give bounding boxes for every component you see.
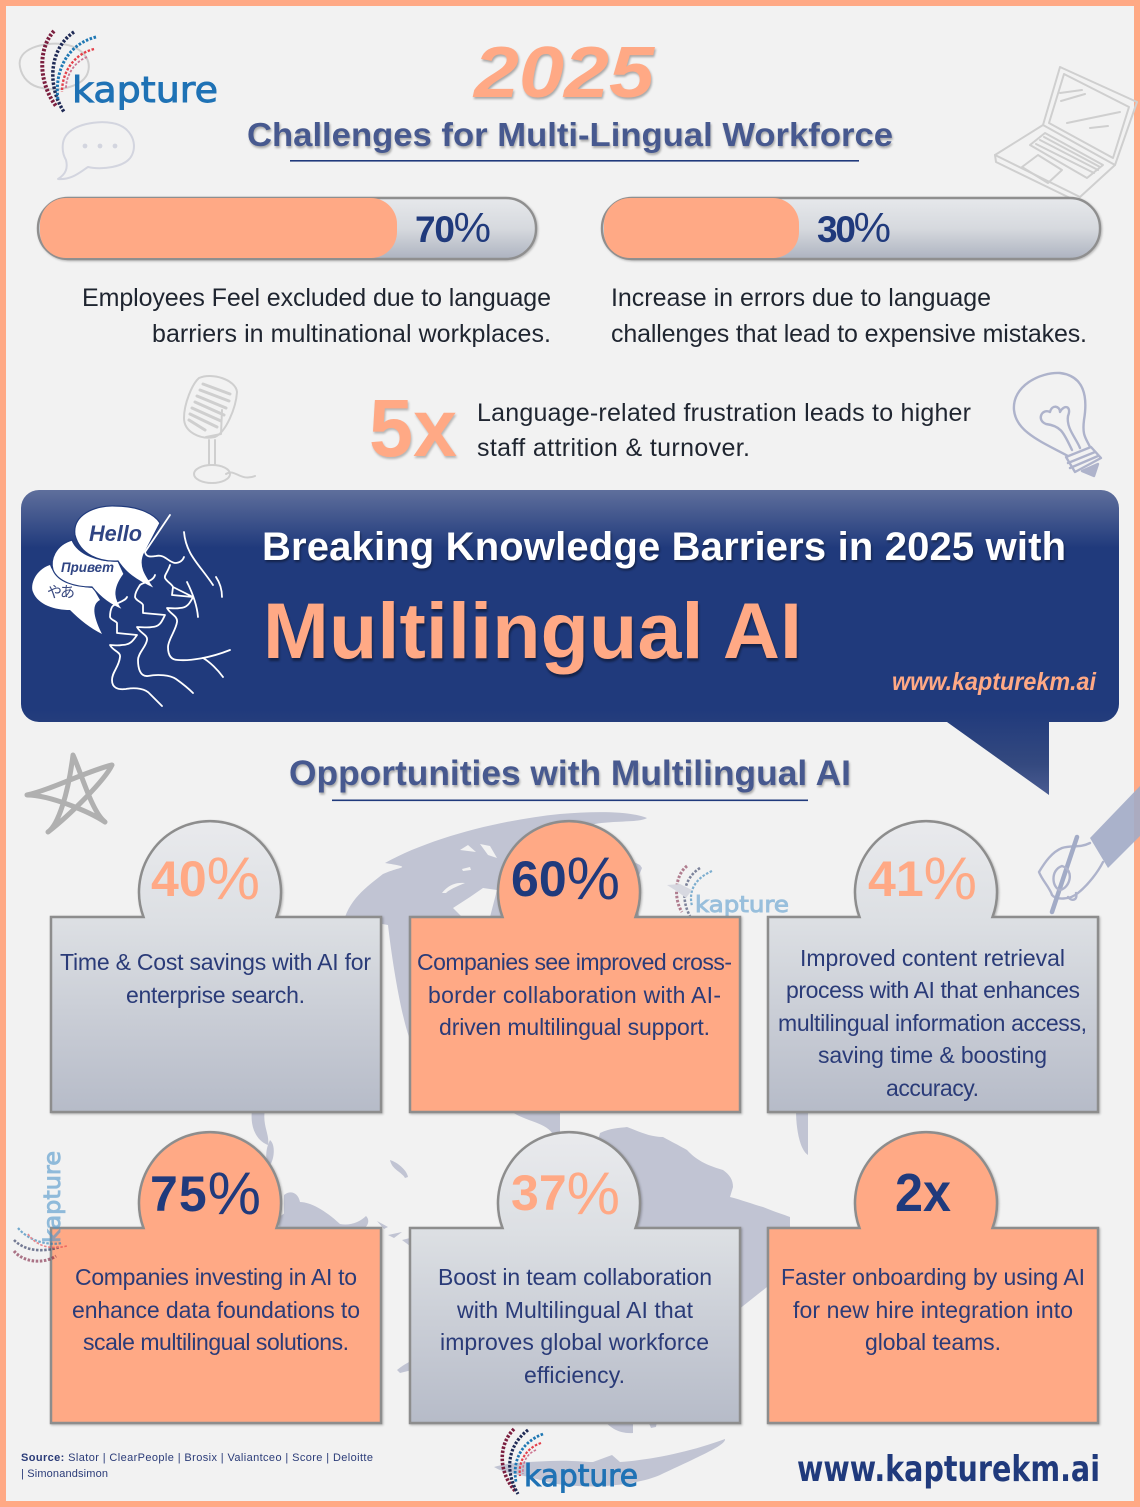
stat: 5x: 5x [369, 383, 457, 474]
source list: | Simonandsimon [21, 1468, 108, 1480]
icon: laptop sketch [995, 67, 1137, 198]
card: 37 percent team collaboration: % [567, 1160, 620, 1227]
card: 41 percent retrieval: accuracy. [886, 1075, 979, 1101]
text: frustration and attrition: Language-related frustration leads to higher [477, 399, 971, 427]
card: 40 percent time and cost: 40 [151, 851, 207, 907]
card: 40 percent time and cost: enterprise search. [126, 982, 305, 1008]
card: 41 percent retrieval [768, 821, 1098, 1112]
icon: microphone sketch [184, 376, 255, 483]
card: 60 percent collaboration: border collaboration with AI- [428, 982, 721, 1008]
watermark logo: kapture mid: kapture [695, 893, 789, 918]
card: 75 percent data foundations: enhance data foundations to [72, 1297, 360, 1323]
watermark logo: vertical kapture: kapture [40, 1151, 66, 1243]
banner title: Multilingual AI [263, 586, 802, 675]
card: 41 percent retrieval: 41 [868, 851, 924, 907]
card: 60 percent collaboration: % [567, 845, 620, 912]
progress bar: 30 percent: 30% [817, 204, 891, 251]
watermark logo: kapture mid [667, 866, 789, 918]
banner heading: Breaking Knowledge Barriers in 2025 with [262, 525, 1066, 569]
progress bar: 30 percent [602, 198, 1100, 259]
logo: kapture top [42, 31, 218, 112]
opportunities underline [332, 800, 808, 801]
heading underline [290, 160, 859, 162]
illustration: speaking faces and bubbles: Привет [61, 559, 114, 575]
heading: opportunities: Opportunities with Multilingual AI [289, 754, 851, 793]
progress bar: 70 percent [38, 198, 536, 259]
text: employees excluded: barriers in multinational workplaces. [152, 320, 551, 348]
card: 41 percent retrieval: saving time & boosting [818, 1042, 1047, 1068]
icon: logo arcs [42, 31, 96, 112]
card: 2x onboarding: for new hire integration into [793, 1297, 1073, 1323]
text: errors increase: challenges that lead to expensive mistakes. [611, 320, 1087, 348]
banner: multilingual AI [21, 490, 1119, 795]
text: frustration and attrition: staff attrition & turnover. [477, 434, 750, 462]
heading: challenges: Challenges for Multi-Lingual Workforce [247, 116, 893, 153]
logo wordmark: kapture [72, 70, 218, 111]
watermark logo: vertical kapture [14, 1151, 67, 1261]
text: errors increase: Increase in errors due to language [611, 284, 991, 312]
text: employees excluded: Employees Feel excluded due to language [82, 284, 551, 312]
card: 41 percent retrieval: process with AI that enhances [786, 977, 1080, 1003]
logo: kapture footer: kapture [524, 1459, 638, 1494]
text: frustration and attrition [477, 399, 971, 462]
illustration: speaking faces and bubbles [32, 506, 230, 706]
background world map silhouette [252, 812, 808, 1486]
card: 75 percent data foundations [51, 1132, 381, 1423]
card: 37 percent team collaboration: with Multilingual AI that [456, 1297, 694, 1323]
card: 2x onboarding: global teams. [865, 1329, 1001, 1355]
title: 2025: 2025 [472, 33, 655, 113]
banner shape with speech tail [21, 490, 1119, 795]
card: 40 percent time and cost: % [207, 845, 260, 912]
card: 75 percent data foundations: scale multilingual solutions. [83, 1329, 349, 1355]
card: 37 percent team collaboration [410, 1132, 740, 1423]
icon: speech bubble outline behind logo [20, 44, 89, 89]
card: 37 percent team collaboration: 37 [511, 1165, 567, 1221]
card: 41 percent retrieval: multilingual information access, [778, 1010, 1087, 1036]
card: 75 percent data foundations: Companies investing in AI to [75, 1264, 357, 1290]
card: 2x onboarding: Faster onboarding by using AI [781, 1264, 1085, 1290]
banner url: www.kapturekm.ai [892, 668, 1097, 696]
logo: kapture footer [502, 1429, 638, 1494]
card: 60 percent collaboration: driven multilingual support. [439, 1014, 710, 1040]
icon: speech bubble with dots [58, 122, 134, 179]
progress bar: 70 percent: 70% [415, 204, 491, 251]
card: 2x onboarding [768, 1132, 1098, 1423]
illustration: speaking faces and bubbles: Hello [89, 521, 142, 546]
card: 41 percent retrieval: Improved content retrieval [800, 945, 1065, 971]
illustration: speaking faces and bubbles: やあ [47, 584, 75, 601]
card: 75 percent data foundations: 75 [150, 1166, 207, 1222]
card: 60 percent collaboration [410, 821, 740, 1112]
card: 40 percent time and cost: Time & Cost savings with AI for [60, 949, 371, 975]
icon: hand writing with pen [1039, 786, 1140, 912]
card: 60 percent collaboration: Companies see improved cross- [417, 949, 732, 975]
card: 75 percent data foundations: % [208, 1160, 261, 1227]
card: 37 percent team collaboration: Boost in team collaboration [438, 1264, 712, 1290]
text: employees excluded [82, 284, 551, 348]
card: 60 percent collaboration: 60 [511, 851, 567, 907]
card: 2x onboarding: 2x [895, 1163, 951, 1223]
icon: star doodle [27, 755, 112, 832]
text: errors increase [611, 284, 1087, 348]
card: 40 percent time and cost [51, 821, 381, 1112]
card: 37 percent team collaboration: improves global workforce [440, 1329, 709, 1355]
icon: light bulb sketch [1014, 373, 1101, 476]
source list: Source: Slator | ClearPeople | Brosix | Valiantceo | Score | Deloitte [21, 1452, 373, 1464]
source list [21, 1452, 373, 1480]
card: 37 percent team collaboration: efficiency. [524, 1362, 625, 1388]
card: 41 percent retrieval: % [924, 845, 977, 912]
